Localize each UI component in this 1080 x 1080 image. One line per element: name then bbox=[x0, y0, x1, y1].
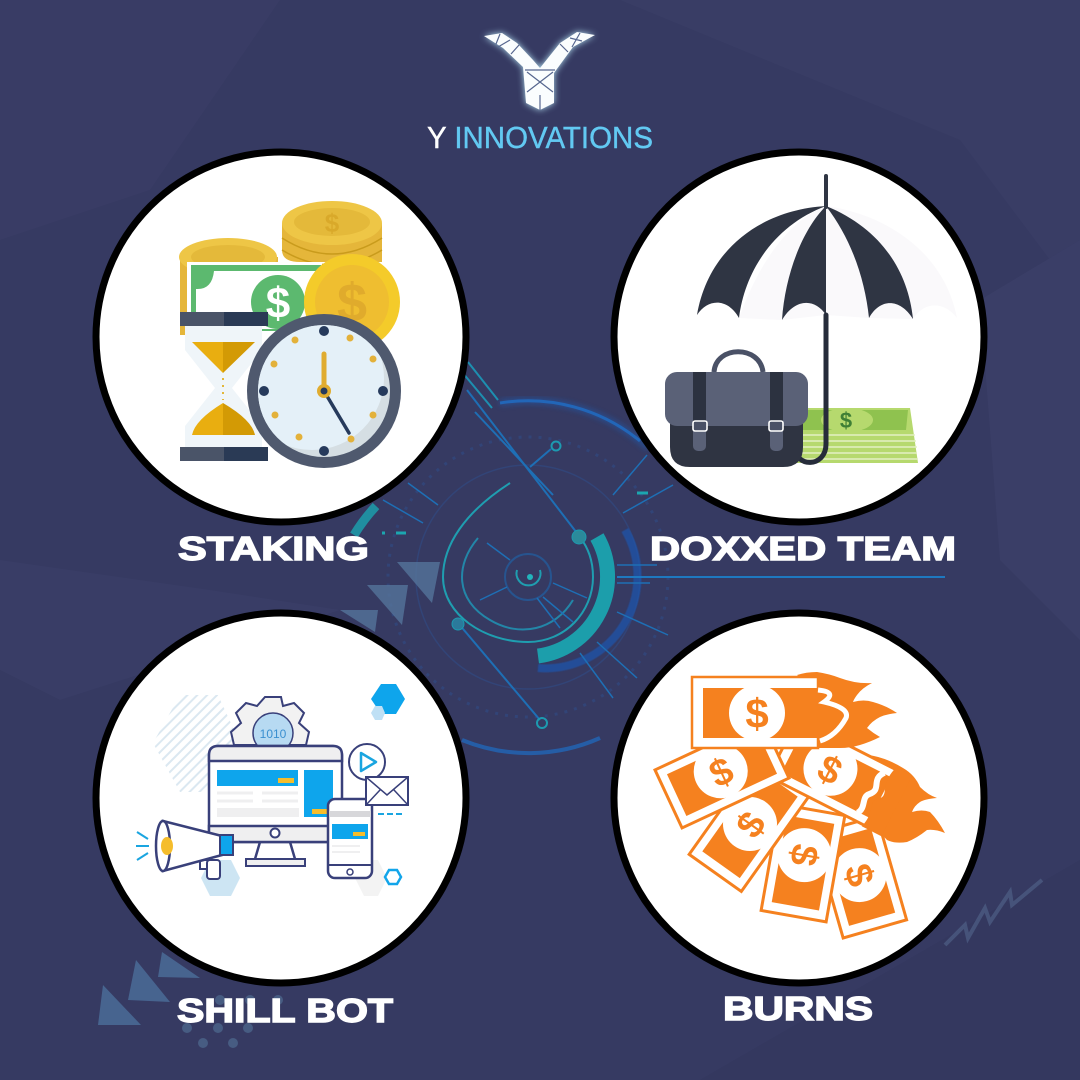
icon: briefcase bbox=[665, 352, 808, 467]
icon: burning banknotes bbox=[655, 672, 945, 938]
icon: gear with binary: 1010 bbox=[260, 727, 287, 741]
icon: hourglass bbox=[180, 312, 268, 461]
icon: coin stacks and cash: $ bbox=[266, 279, 290, 328]
decorative triangles centre bbox=[340, 562, 440, 632]
icon: lower hexagons bbox=[201, 860, 401, 896]
decorative dots bottom left bbox=[182, 995, 283, 1048]
heading: doxxed team: DOXXED TEAM bbox=[650, 530, 956, 567]
decorative triangles bottom left bbox=[98, 952, 200, 1025]
central tech HUD graphic bbox=[354, 362, 945, 753]
note: left: $ bbox=[703, 750, 740, 797]
note: bottom centre: $ bbox=[781, 841, 826, 869]
note: bottom centre bbox=[761, 804, 845, 922]
note: top: $ bbox=[745, 690, 769, 737]
icon: hatched hexagon bbox=[153, 695, 240, 792]
logo: Y mark bbox=[484, 32, 595, 110]
heading: shill bot: SHILL BOT bbox=[177, 992, 393, 1029]
icon: play bubble and envelope bbox=[349, 744, 408, 814]
note: left bbox=[655, 720, 789, 828]
note: centre left bbox=[689, 757, 811, 891]
icon: money stack bbox=[787, 408, 918, 463]
logo text: Y INNOVATIONS: Y INNOVATIONS bbox=[427, 120, 653, 155]
note: centre left: $ bbox=[728, 804, 775, 846]
panel: burns bbox=[614, 613, 984, 983]
note: right bbox=[767, 718, 912, 836]
icon: megaphone bbox=[136, 821, 233, 879]
panel: shill bot bbox=[96, 613, 466, 983]
flame: right note bbox=[868, 755, 945, 843]
heading: staking: STAKING bbox=[178, 530, 369, 567]
icon: clock bbox=[240, 306, 401, 468]
note: top bbox=[692, 677, 847, 748]
icon: coin stacks and cash bbox=[179, 201, 400, 350]
icon: gear with binary bbox=[231, 697, 309, 753]
heading: burns: BURNS bbox=[723, 990, 873, 1027]
icon: coin stacks and cash: $ bbox=[337, 273, 367, 333]
flame: top note bbox=[797, 672, 897, 748]
icon: smartphone bbox=[328, 799, 372, 878]
note: bottom right: $ bbox=[835, 859, 882, 891]
icon: monitor bbox=[209, 746, 342, 866]
decorative zigzag line bbox=[945, 880, 1042, 945]
icon: coin stacks and cash: $ bbox=[325, 208, 340, 238]
panel: staking bbox=[96, 152, 466, 522]
icon: money stack: $ bbox=[840, 408, 852, 433]
panel: doxxed team bbox=[614, 152, 984, 522]
note: bottom right bbox=[813, 816, 907, 938]
icon: umbrella bbox=[697, 176, 957, 462]
note: right: $ bbox=[811, 747, 848, 794]
icon: hexagons top right bbox=[371, 684, 405, 720]
